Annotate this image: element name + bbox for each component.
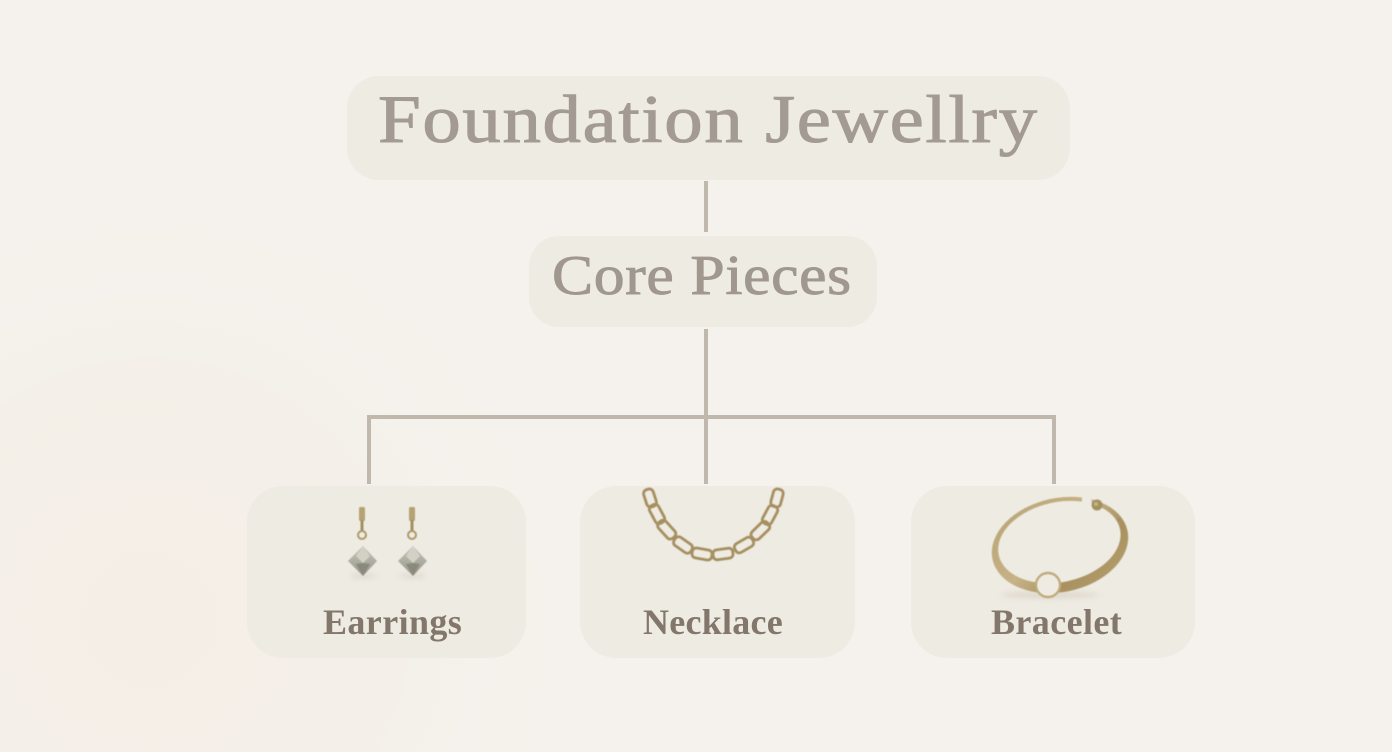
connector lines (367, 181, 1056, 484)
title heading: Foundation Jewellry (378, 81, 1039, 157)
panel: necklace (580, 486, 855, 658)
icon: bracelet (983, 485, 1137, 605)
icon: necklace (642, 488, 784, 561)
subtitle heading: Core Pieces (552, 245, 852, 306)
panel: earrings (247, 486, 526, 658)
bracelet label: Bracelet (991, 602, 1122, 642)
necklace label: Necklace (643, 602, 783, 642)
earrings label: Earrings (323, 602, 462, 642)
icon: earrings (348, 507, 427, 578)
panel: bracelet (911, 485, 1195, 658)
title panel (347, 76, 1070, 180)
subtitle panel (529, 236, 877, 327)
